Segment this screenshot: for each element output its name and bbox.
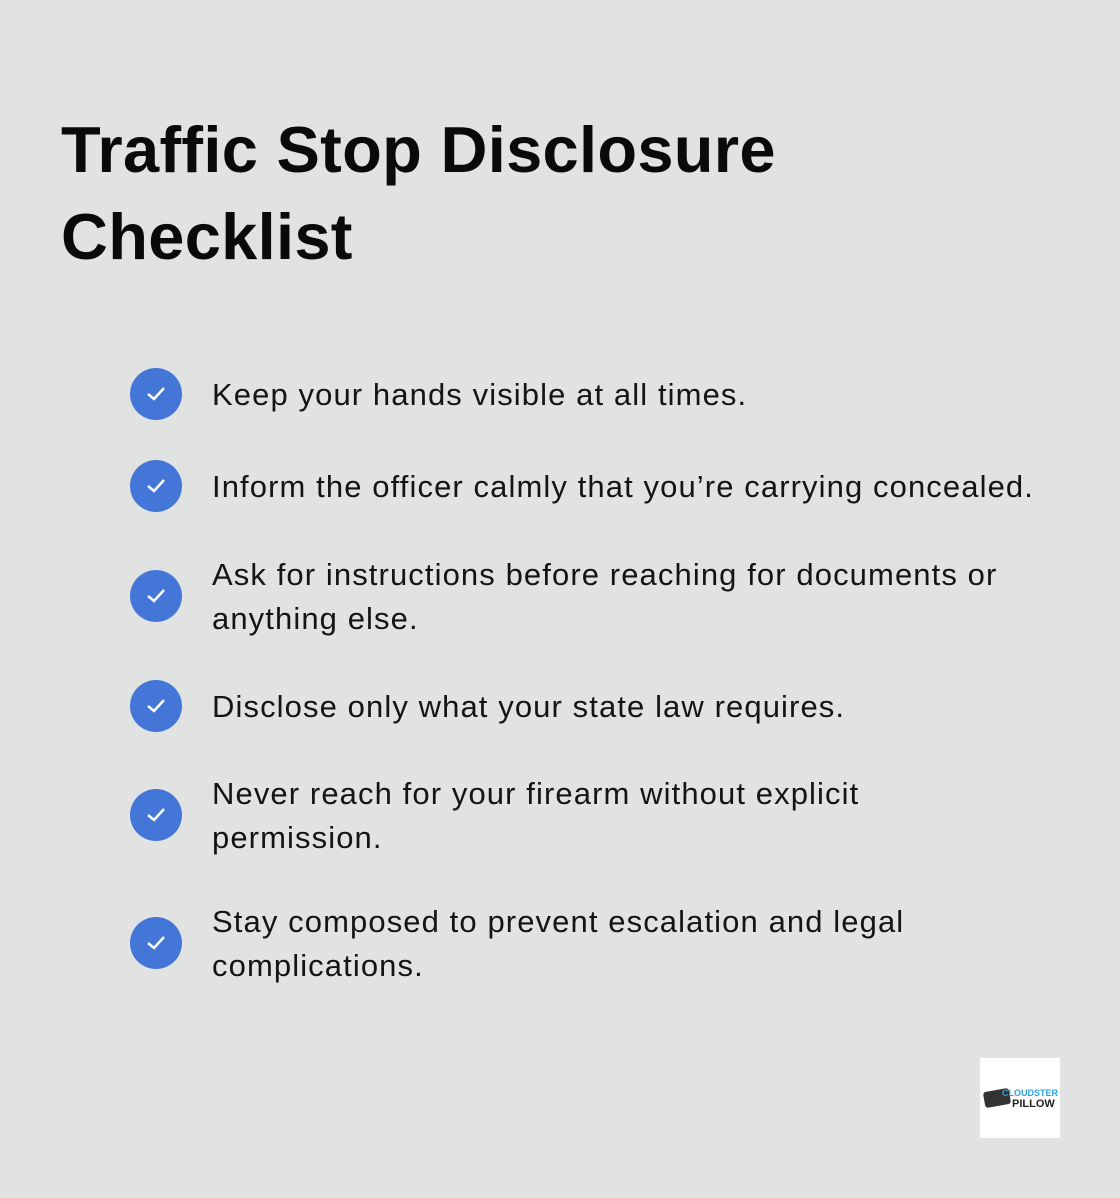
text 3: Ask for instructions before reaching for documents or bbox=[212, 557, 997, 592]
text 3 bbox=[212, 557, 997, 636]
text 6: complications. bbox=[212, 948, 424, 983]
title bbox=[61, 113, 776, 273]
logo: PILLOW bbox=[1012, 1098, 1055, 1110]
item 6 bbox=[130, 904, 904, 983]
icon: check bbox=[130, 570, 182, 622]
text 2: Inform the officer calmly that you’re carrying concealed. bbox=[212, 469, 1034, 504]
icon: check bbox=[130, 680, 182, 732]
text 3: anything else. bbox=[212, 601, 419, 636]
text 1: Keep your hands visible at all times. bbox=[212, 377, 747, 412]
item 4 bbox=[130, 680, 845, 732]
text 4: Disclose only what your state law requires. bbox=[212, 689, 845, 724]
icon: check bbox=[130, 917, 182, 969]
title: Traffic Stop Disclosure bbox=[61, 113, 776, 186]
logo bbox=[980, 1058, 1060, 1138]
item 2 bbox=[130, 460, 1034, 512]
logo: CLOUDSTER bbox=[1002, 1088, 1058, 1098]
title: Checklist bbox=[61, 200, 353, 273]
item 3 bbox=[130, 557, 997, 636]
item 1 bbox=[130, 368, 747, 420]
text 6 bbox=[212, 904, 904, 983]
text 5 bbox=[212, 776, 859, 855]
text 5: Never reach for your firearm without explicit bbox=[212, 776, 859, 811]
text 6: Stay composed to prevent escalation and legal bbox=[212, 904, 904, 939]
item 5 bbox=[130, 776, 859, 855]
text 5: permission. bbox=[212, 820, 383, 855]
icon: check bbox=[130, 368, 182, 420]
icon: check bbox=[130, 460, 182, 512]
icon: check bbox=[130, 789, 182, 841]
